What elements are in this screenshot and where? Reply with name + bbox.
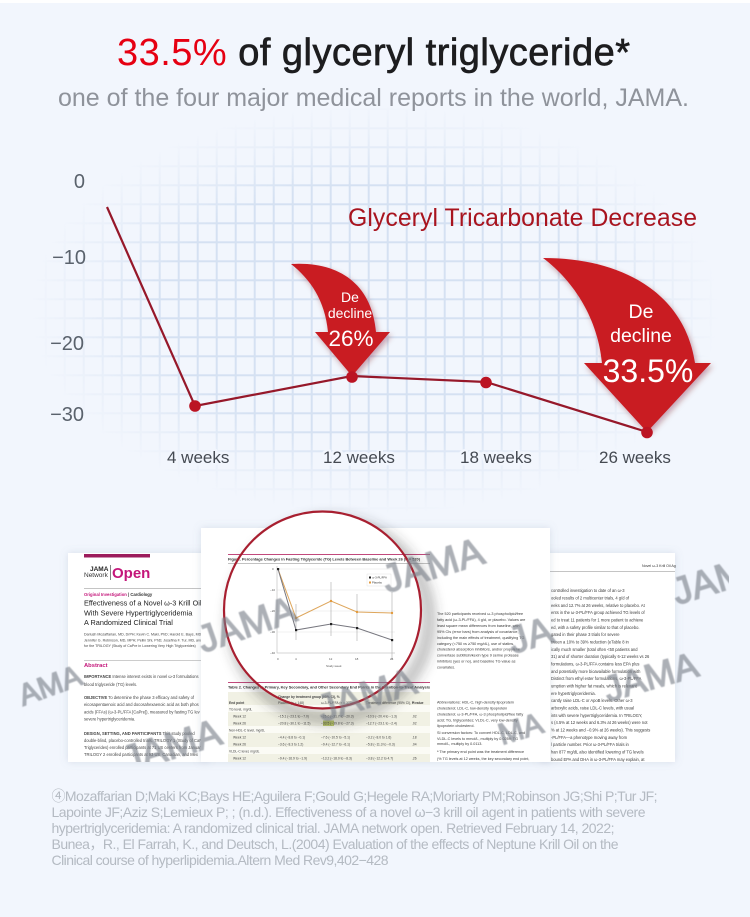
right document page: 31) and of shorter duration (typically 6-12 weeks vs 26 — [551, 654, 650, 659]
figure: triglyceride line chart: 4 — [295, 657, 297, 661]
center column paragraph: VLDL-C levels to mmol/L, multiply by 0.0259; TG — [437, 737, 518, 741]
results table: ω-3-PL/FFA (n = 372) — [321, 701, 353, 705]
results table: End point — [229, 701, 245, 705]
center column paragraph: The 520 participants received ω-3 phospholipid/free — [437, 612, 523, 616]
references — [52, 788, 658, 868]
right document page: cantly raise LDL-C or ApoB levels. Other ω-3 — [551, 698, 633, 703]
right document page: s (4.5% at 12 weeks and 6.3% at 26 weeks) were not — [551, 720, 648, 725]
center column paragraph: inhibitors (yes or no), and baseline TG value as — [437, 660, 516, 664]
right document page: % at 12 weeks and −0.9% at 26 weeks). This suggests — [551, 728, 650, 732]
results table: Non-HDL-C level, mg/dL — [229, 728, 265, 732]
results table: Treatment difference (95% CI), % — [366, 701, 415, 705]
JAMA watermarks: JAMA — [192, 589, 302, 662]
left document page: Original Investigation | Cardiology — [84, 592, 153, 597]
abstract text: Triglycerides) enrolled participants at 71 US centers from January — [84, 745, 204, 750]
subtitle: one of the four major medical reports in the world, JAMA. — [58, 84, 689, 112]
figure: triglyceride line chart: −40 — [270, 651, 275, 655]
figure: triglyceride line chart — [270, 566, 395, 668]
center column paragraph: cholesterol; ω-3-PL/FFA, ω-3 phospholipid/free fatty — [437, 712, 523, 716]
results table: Placebo (n = 148) — [278, 701, 304, 705]
center column paragraph: lipoprotein cholesterol. — [437, 724, 475, 728]
results table: Week 12 — [233, 714, 246, 718]
results table: P value — [412, 701, 424, 705]
figure: triglyceride line chart: ω-3-PL/FFA — [372, 576, 387, 580]
right document page: ooled results of 2 multicenter trials, 4 g/d of — [551, 596, 630, 600]
article title: A Randomized Clinical Trial — [84, 618, 173, 627]
abstract text — [84, 674, 204, 757]
article title — [84, 598, 222, 627]
results table: .18 — [412, 736, 417, 740]
JAMA watermarks: JAMA — [599, 644, 703, 710]
callout arrow: 33.5 percent — [543, 258, 711, 432]
results table: −33.5 (−39.8 to −27.3) — [321, 722, 354, 726]
results table: −3.2 (−8.0 to 1.6) — [366, 736, 391, 740]
center document page: Table 2. Changes in Primary, Key Secondary, and Other Secondary End Points in the Intention-to-Treat Analysis — [228, 684, 430, 690]
x axis labels: 12 weeks — [323, 448, 395, 467]
abstract text: eicosapentaenoic acid and docosahexaenoic acid as both phos — [84, 702, 199, 707]
right document page: -PL/FFA—a phenotype moving away from — [551, 735, 628, 740]
right document page: ere hypertriglyceridemia. — [551, 691, 596, 696]
right document page: Distinct from ethyl ester formulations, ω-3-PL/FFA — [551, 676, 642, 681]
title: 33.5% of glyceryl triglyceride* — [117, 32, 630, 74]
data line — [107, 207, 647, 432]
center column paragraph: category (<750 vs ≥750 mg/dL), use of statins, — [437, 642, 514, 646]
results table: .04 — [412, 742, 417, 746]
figure: triglyceride line chart: 26 — [390, 657, 394, 661]
left document page: Jennifer G. Robinson, MD, MPH; Peilin Shi, PhD; Josefina F. Tur, MD, and — [84, 638, 202, 642]
abstract text: severe hypertriglyceridemia. — [84, 716, 135, 722]
center column paragraph: SI conversion factors: To convert HDL-C, LDL-C, and — [437, 731, 525, 735]
results table: −9.4 (−16.9 to −1.9) — [278, 756, 307, 760]
y axis labels — [50, 171, 86, 426]
right document page: controlled investigation to date of an ω-3 — [551, 588, 625, 593]
journal logo — [84, 565, 150, 582]
center column paragraph: mmol/L, multiply by 0.0113. — [437, 742, 482, 746]
center document page: Figure. Percentage Changes in Fasting Triglyceride (TG) Levels Between Baseline and Week 26 (N = 520) — [228, 556, 421, 562]
right document page: han 877 mg/dL also identified lowering of TG levels — [551, 750, 644, 754]
results table: −20.8 (−30.1 to −11.5) — [278, 722, 310, 726]
results table — [228, 692, 430, 762]
right document page: ed, with a safety profile similar to that of placebo. — [551, 625, 640, 630]
references: Lapointe JF;Aziz S;Lemieux P; ; (n.d.). Effectiveness of a novel ω−3 krill oil agent in patients with severe — [52, 804, 646, 820]
left document page — [68, 553, 222, 762]
results table: −3.8 (−12.2 to 4.7) — [366, 756, 393, 760]
right document page: ically much smaller (total often <50 patients and — [551, 647, 638, 652]
results table: −9.4 (−12.7 to −6.1) — [321, 742, 350, 746]
JAMA watermarks — [22, 539, 729, 762]
y axis labels: 0 — [74, 171, 85, 193]
right document page: arboxylic acids, raise LDL-C levels, with usual — [551, 706, 634, 710]
results table: −10.9 (−20.4 to −1.3) — [366, 714, 397, 718]
results table: Week 12 — [233, 736, 246, 740]
right document page: formulations, ω-3-PL/FFA contains less EPA plus — [551, 662, 639, 666]
x axis labels: 18 weeks — [460, 448, 532, 467]
y axis labels: −10 — [52, 247, 86, 269]
article title: With Severe Hypertriglyceridemia — [84, 608, 193, 618]
center column paragraph: acid; TG, triglycerides; VLDL-C, very low-density — [437, 718, 518, 722]
callout arrow: 33.5 percent: 33.5% — [603, 353, 693, 389]
references: Bunea，R., El Farrah, K., and Deutsch, L.(2004) Evaluation of the effects of Neptune Krill Oil on the — [52, 836, 619, 852]
center column paragraph: ᵃ The primary end point was the treatment difference — [437, 750, 524, 754]
x axis labels — [167, 448, 671, 467]
center column paragraph: cholesterol; LDL-C, low-density lipoprotein — [437, 706, 507, 710]
center column paragraph: cholesterol absorption inhibitors, and/or propylene — [437, 648, 520, 652]
results table: .02 — [412, 714, 417, 718]
left document page: Dariush Mozaffarian, MD, DrPH; Kevin C. Maki, PhD; Harold E. Bays, MD — [84, 632, 202, 636]
right document page: tween a 10% to 39% reduction (eTable 8 in — [551, 640, 630, 644]
figure: triglyceride line chart: 0 — [277, 657, 279, 661]
right document page — [540, 553, 676, 762]
figure: triglyceride line chart: −20 — [270, 609, 275, 613]
results table: −12.7 (−23.1 to −2.4) — [366, 722, 397, 726]
references: Clinical course of hyperlipidemia.Altern Med Rev9,402−428 — [52, 852, 389, 868]
results table: −4.4 (−8.8 to −0.1) — [278, 736, 305, 740]
results table: Change by treatment group (95% CI), % — [278, 695, 340, 699]
center column paragraph — [437, 612, 529, 761]
results table: VLDL-C level, mg/dL — [229, 750, 260, 754]
right document page: umption with higher fat meals, which is relevant — [551, 684, 638, 688]
right document page: ints with severe hypertriglyceridemia. In TRILOGY, — [551, 713, 642, 718]
abstract text: acids (FFAs) (ω-3-PL/FFA [CaPre]), measured by fasting TG lev — [84, 710, 201, 714]
results table: .26 — [412, 756, 417, 760]
results table: .02 — [412, 722, 417, 726]
x axis labels: 26 weeks — [599, 448, 671, 467]
left document page: Abstract — [84, 663, 108, 669]
journal logo: JAMA — [90, 566, 109, 573]
x axis labels: 4 weeks — [167, 448, 229, 467]
abstract text: TRILOGY 2 enrolled participants at 93 US, Canadian, and Mex — [84, 752, 198, 757]
right document page: l particle number. Prior ω-3-PL/FFA trials in — [551, 742, 630, 747]
abstract text: blood triglyceride (TG) levels. — [84, 682, 137, 687]
figure: triglyceride line chart: −30 — [270, 630, 275, 634]
right document page: and potentially more bioavailable formulation with — [551, 669, 641, 674]
figure: triglyceride line chart: Study week — [326, 664, 342, 668]
callout arrow: 26 percent: 26% — [328, 326, 374, 351]
chart heading: Glyceryl Tricarbonate Decrease — [348, 205, 697, 232]
center column paragraph: (% TG levels at 12 weeks, the key secondary end point, — [437, 757, 529, 761]
JAMA watermarks: JAMA — [312, 661, 422, 731]
center column paragraph: including the main effects of treatment, qualifying TG — [437, 636, 524, 640]
JAMA watermarks: JA — [503, 609, 559, 663]
center column paragraph: covariates. — [437, 666, 455, 670]
right document page: bound EPA and DHA in ω-3-PL/FFA may explain, at — [551, 757, 645, 762]
figure: triglyceride line chart: 12 — [329, 657, 333, 661]
right document page: ents in the ω-3-PL/FFA group achieved TG levels of — [551, 610, 646, 615]
right document page: Novel ω-3 Krill Oil Ag — [642, 564, 676, 568]
results table: Week 12 — [233, 756, 246, 760]
callout arrow: 33.5 percent: decline — [610, 325, 672, 347]
abstract text: double-blind, placebo-controlled trials. TRILOGY 1 (Study of CaP — [84, 738, 202, 743]
callout arrow: 33.5 percent: De — [629, 301, 653, 323]
center column paragraph: convertase subtilisin/kexin type 9 serine protease — [437, 654, 519, 658]
results table: −26.0 (−31.7 to −20.3) — [321, 714, 354, 718]
JAMA watermarks: MA — [494, 707, 547, 752]
callout arrow: 26 percent: De — [341, 289, 359, 305]
JAMA watermarks: JAMA — [377, 530, 489, 602]
magnifier circle shadow — [233, 522, 429, 718]
results table: −3.6 (−8.3 to 1.2) — [278, 742, 303, 746]
abstract text: IMPORTANCE Intense interest exists in novel ω-3 formulations — [84, 674, 199, 679]
results table: −5.8 (−11.3 to −0.3) — [366, 742, 395, 746]
JAMA watermarks: AMA — [14, 659, 86, 713]
references: hypertriglyceridemia: A randomized clinical trial. JAMA network open. Retrieved February 14, 2022; — [52, 820, 614, 836]
center column paragraph: Abbreviations: HDL-C, high-density lipoprotein — [437, 700, 514, 704]
results table: TG level, mg/dL — [229, 708, 252, 712]
figure: triglyceride line chart: 0 — [272, 567, 274, 571]
results table: −7.6 (−10.5 to −5.1) — [321, 736, 350, 740]
results table: −13.2 (−18.0 to −8.3) — [321, 756, 352, 760]
abstract text: OBJECTIVE To determine the phase 3 efficacy and safety of — [84, 695, 195, 700]
abstract text: DESIGN, SETTING, AND PARTICIPANTS This study pooled — [84, 731, 195, 736]
journal logo: Open — [112, 565, 150, 582]
right document page: eeks and 12.7% at 26 weeks, relative to placebo. At — [551, 603, 646, 608]
magnifier circle — [224, 512, 421, 708]
results table: Week 26 — [233, 742, 246, 746]
article title: Effectiveness of a Novel ω-3 Krill Oil Agent — [84, 598, 222, 608]
y axis labels: −20 — [50, 333, 84, 355]
data points — [189, 371, 653, 438]
figure: triglyceride line chart: Placebo — [372, 580, 383, 584]
left document page: for the TRILOGY (Study of CaPre in Lowering Very High Triglycerides) — [84, 644, 196, 648]
journal article collage — [14, 512, 750, 782]
center column paragraph: fatty acid (ω-3-PL/FFA), 4 g/d, or placebo. Values are — [437, 618, 525, 622]
references: ④Mozaffarian D;Maki KC;Bays HE;Aguilera F;Gould G;Hegele RA;Moriarty PM;Robinson JG;Shi P;Tur JF; — [52, 788, 658, 804]
figure: triglyceride line chart: −10 — [270, 588, 275, 592]
y axis labels: −30 — [50, 404, 84, 426]
right document page: ed to treat 11 patients for 1 more patient to achieve — [551, 618, 644, 622]
JAMA watermarks: JAMA — [117, 712, 227, 782]
center document page — [201, 512, 550, 762]
right document page: gated in their phase 3 trials for severe — [551, 632, 620, 637]
journal logo: Network — [84, 572, 109, 579]
callout arrow: 26 percent — [291, 264, 390, 376]
line chart: glyceryl tricarbonate decrease — [50, 171, 711, 467]
callout arrow: 26 percent: decline — [328, 305, 372, 321]
results table: −15.1 (−23.1 to −7.0) — [278, 714, 309, 718]
figure: triglyceride line chart: 18 — [355, 657, 359, 661]
background grid — [72, 130, 678, 490]
center column paragraph: 95% CIs (error bars) from analysis of covariance, — [437, 630, 518, 634]
results table: Week 26 — [233, 722, 246, 726]
center column paragraph: least square mean differences from baseline, with — [437, 624, 519, 628]
